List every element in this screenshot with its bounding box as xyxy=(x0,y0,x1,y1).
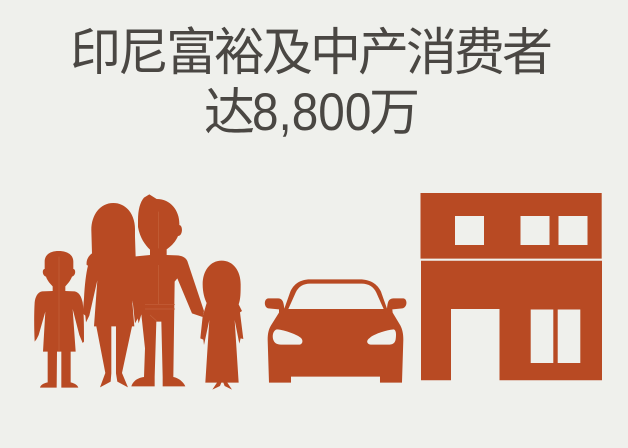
icon: man xyxy=(130,194,204,386)
title: 达 xyxy=(204,84,255,141)
title xyxy=(70,24,550,142)
icon: girl xyxy=(200,261,243,390)
house upper floor xyxy=(420,193,602,259)
icon: boy xyxy=(34,251,84,388)
icon: car xyxy=(265,279,406,383)
title: 万 xyxy=(369,84,420,141)
icon: woman xyxy=(83,203,147,387)
icon: family xyxy=(34,194,243,390)
title: 8,800 xyxy=(252,83,371,142)
icon: house xyxy=(420,193,602,380)
house lower floor xyxy=(421,261,602,380)
title: 印尼富裕及中产消费者 xyxy=(70,24,550,81)
